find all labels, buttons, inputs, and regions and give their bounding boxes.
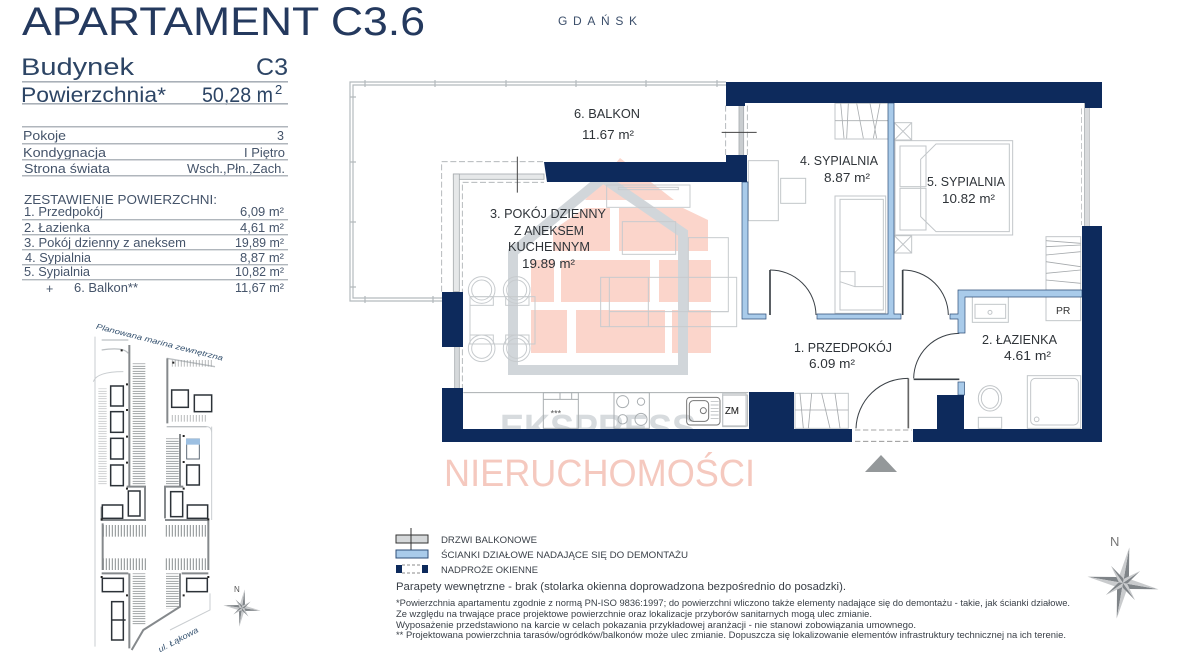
floor plan: demountable partitions xyxy=(742,103,1082,395)
icon: small compass xyxy=(221,585,263,629)
room labels: 5. SYPIALNIA xyxy=(927,175,1006,189)
panel: area breakdown: ZESTAWIENIE POWIERZCHNI: xyxy=(24,193,217,207)
furniture: kitchen xyxy=(463,393,748,428)
watermark: house logo: EKSPRESS xyxy=(500,408,696,450)
panel: building summary: C3 xyxy=(256,54,288,81)
room labels: 11.67 m² xyxy=(582,128,634,142)
legend: NADPROŻE OKIENNE xyxy=(441,565,538,576)
panel: area breakdown: 5. Sypialnia xyxy=(24,265,90,279)
room labels: 1. PRZEDPOKÓJ xyxy=(794,340,892,355)
room labels: 3. POKÓJ DZIENNY xyxy=(490,206,607,221)
panel: area breakdown: 19,89 m² xyxy=(235,236,284,250)
floor plan: living room and left windows: *** xyxy=(551,409,562,419)
panel: building summary: 2 xyxy=(275,82,282,97)
panel: building summary: Powierzchnia* xyxy=(21,84,166,107)
notes: Ze względu na trwające prace projektowe powierzchnie oraz lokalizacje przyborów sanitarnych mogą ulec zmianie. xyxy=(396,609,872,619)
legend xyxy=(396,528,688,576)
panel: area breakdown: 11,67 m² xyxy=(235,281,284,295)
city label: GDAŃSK xyxy=(558,13,637,28)
room labels: 6. BALKON xyxy=(574,107,640,121)
room labels: 8.87 m² xyxy=(824,171,870,185)
icon: small compass: N xyxy=(234,585,240,594)
panel: building summary xyxy=(21,54,288,107)
panel: area breakdown: 3. Pokój dzienny z aneksem xyxy=(24,236,186,250)
floor plan: structural walls xyxy=(442,82,1102,442)
room labels xyxy=(490,107,1058,371)
panel: area breakdown: 8,87 m² xyxy=(240,251,284,265)
room labels: KUCHENNYM xyxy=(508,240,590,254)
panel: area breakdown: 4,61 m² xyxy=(240,221,284,235)
room labels: 6.09 m² xyxy=(809,357,855,371)
panel: apartment parameters xyxy=(22,126,288,176)
panel: building summary: 50,28 m xyxy=(202,84,273,107)
panel: area breakdown: 6. Balkon** xyxy=(74,281,138,295)
room labels: Z ANEKSEM xyxy=(514,224,584,238)
panel: apartment parameters: 3 xyxy=(277,129,284,143)
panel: apartment parameters: Pokoje xyxy=(23,129,66,143)
panel: area breakdown: 2. Łazienka xyxy=(24,221,90,235)
icon: entrance arrow xyxy=(865,455,897,472)
room labels: 4. SYPIALNIA xyxy=(800,154,879,168)
floor plan: living room and left windows xyxy=(442,103,757,428)
watermark: house logo xyxy=(444,158,755,495)
panel: building summary: Budynek xyxy=(21,54,135,81)
room labels: 19.89 m² xyxy=(522,257,575,271)
panel: area breakdown: 4. Sypialnia xyxy=(25,251,91,265)
floor plan: right-hand rooms furniture: ZM xyxy=(725,406,739,417)
panel: apartment parameters: I Piętro xyxy=(244,146,285,160)
floor plan: living room and left windows: ZM xyxy=(725,406,739,417)
notes: Parapety wewnętrzne - brak (stolarka okienna doprowadzona bezpośrednio do posadzki). xyxy=(396,581,846,593)
notes xyxy=(396,581,1070,640)
panel: apartment parameters: Wsch.,Płn.,Zach. xyxy=(187,162,285,176)
panel: area breakdown: 10,82 m² xyxy=(235,265,284,279)
panel: area breakdown: 6,09 m² xyxy=(240,205,284,219)
watermark: house logo: NIERUCHOMOŚCI xyxy=(444,450,755,495)
room labels: 4.61 m² xyxy=(1004,349,1051,363)
site plan xyxy=(93,322,224,653)
site plan: Planowana marina zewnętrzna xyxy=(95,322,224,363)
legend: DRZWI BALKONOWE xyxy=(441,535,537,546)
floor plan: right-hand rooms furniture xyxy=(723,103,1089,441)
panel: area breakdown: + xyxy=(46,282,53,296)
floor plan: balcony railing xyxy=(350,80,726,303)
panel: area breakdown: 1. Przedpokój xyxy=(24,205,103,219)
room labels: 2. ŁAZIENKA xyxy=(982,333,1058,347)
panel: apartment parameters: Strona świata xyxy=(24,162,110,176)
notes: Wyposażenie przedstawiono na karcie w celach pokazania przykładowej aranżacji - nie stanowi zobowiązania umownego. xyxy=(396,620,916,630)
legend: ŚCIANKI DZIAŁOWE NADAJĄCE SIĘ DO DEMONTAŻU xyxy=(441,549,688,561)
icon: large compass xyxy=(1081,534,1165,625)
panel: apartment parameters: Kondygnacja xyxy=(23,146,106,160)
doors xyxy=(770,270,959,428)
notes: ** Projektowana powierzchnia tarasów/ogródków/balkonów może ulec zmianie. Dopuszcza się lokalizowanie elementów infrastruktury technicznej na ich terenie. xyxy=(396,630,1066,640)
title: APARTAMENT C3.6 xyxy=(22,0,425,44)
floor plan: right-hand rooms furniture: PR xyxy=(1056,306,1070,317)
panel: area breakdown xyxy=(22,193,288,296)
icon: large compass: N xyxy=(1110,534,1119,549)
notes: *Powierzchnia apartamentu zgodnie z normą PN-ISO 9836:1997; do powierzchni wliczono także elementy nadające się do demontażu - takie, jak ścianki działowe. xyxy=(396,598,1070,608)
room labels: 10.82 m² xyxy=(942,192,995,206)
furniture: living room xyxy=(468,185,737,362)
